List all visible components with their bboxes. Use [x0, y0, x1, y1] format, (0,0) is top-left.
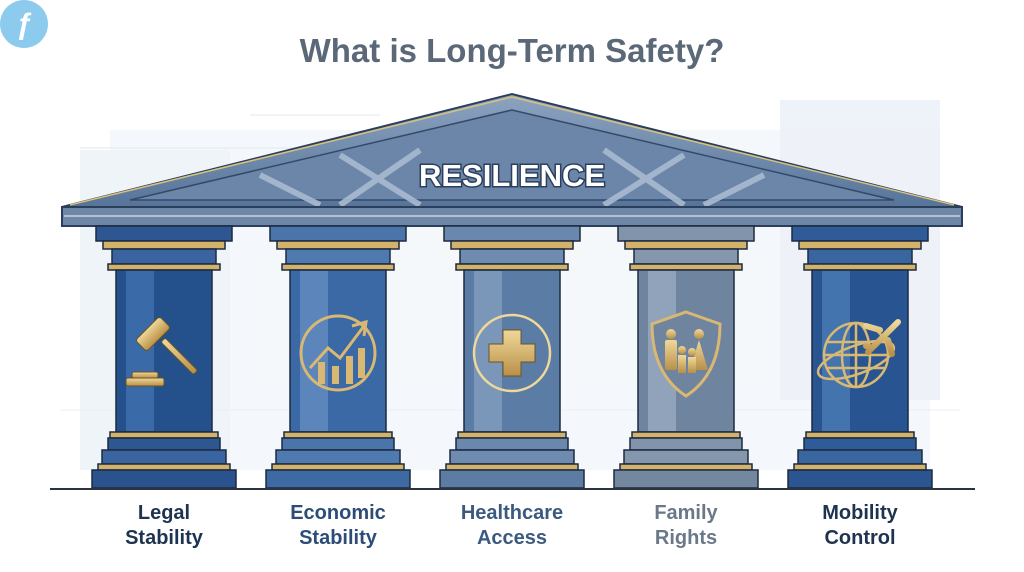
label: mobility control: Control	[824, 527, 896, 549]
labels	[125, 502, 899, 549]
logo icon	[0, 0, 48, 48]
label: healthcare access: Access	[477, 527, 547, 549]
background decoration	[60, 100, 960, 470]
icon: globe with plane	[814, 322, 898, 387]
icon: family shield	[652, 312, 720, 396]
ground line	[50, 488, 975, 490]
pillar: family rights	[614, 226, 758, 488]
pillar: healthcare access	[440, 226, 584, 488]
icon: medical cross	[474, 315, 550, 391]
label: economic stability: Stability	[299, 527, 378, 549]
label: healthcare access: Healthcare	[461, 502, 563, 524]
logo icon: ƒ	[16, 8, 32, 41]
pillar: economic stability	[266, 226, 410, 488]
roof pediment	[62, 94, 962, 207]
label: economic stability: Economic	[290, 502, 386, 524]
label: legal stability: Legal	[138, 502, 190, 524]
pillar: legal stability	[92, 226, 236, 488]
icon: gavel	[126, 316, 198, 386]
label: mobility control: Mobility	[822, 502, 899, 524]
pillar: mobility control	[788, 226, 932, 488]
entablature	[62, 207, 962, 226]
icon: growth chart	[301, 316, 375, 390]
label: family rights: Rights	[655, 527, 717, 549]
label: legal stability: Stability	[125, 527, 204, 549]
label: family rights: Family	[654, 502, 719, 524]
title: What is Long-Term Safety?	[300, 32, 724, 69]
roof label: RESILIENCE	[419, 158, 605, 193]
